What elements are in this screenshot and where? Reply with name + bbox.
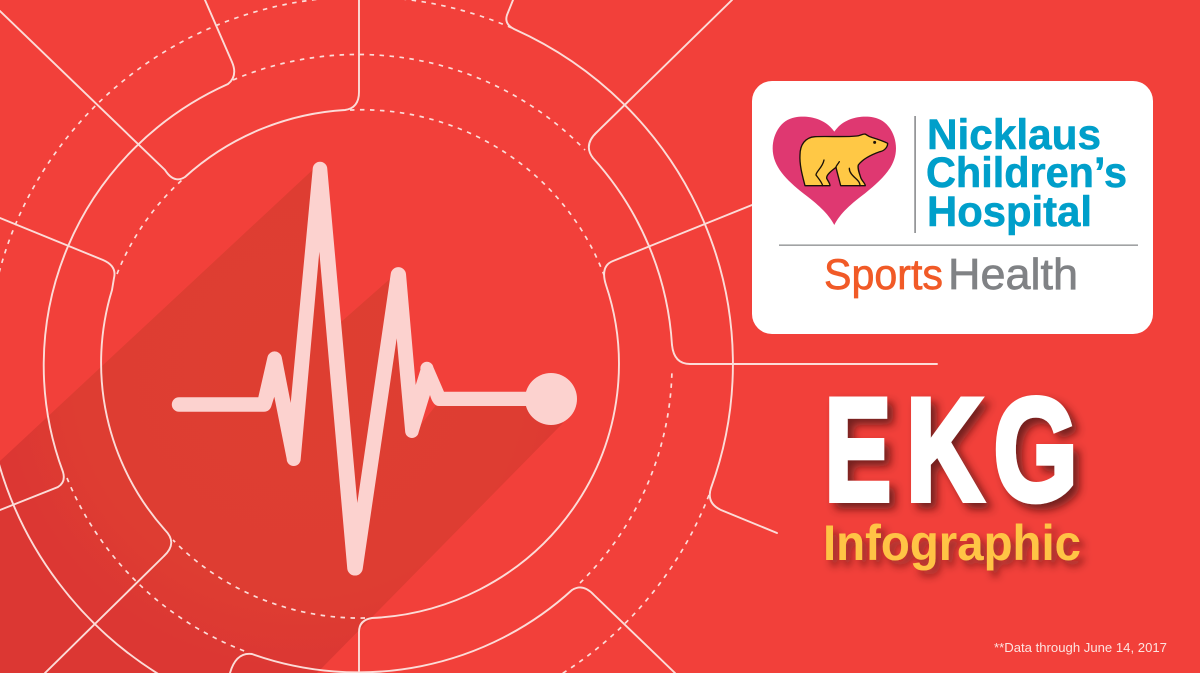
subtitle: Infographic: Infographic <box>823 515 1081 571</box>
circuit rings: dashed segments <box>0 0 709 673</box>
title: EKG: G <box>994 368 1078 531</box>
long shadow of the heartbeat line <box>0 163 563 673</box>
footnote: **Data through June 14, 2017 <box>994 640 1167 655</box>
hospital name: Nicklaus <box>927 111 1101 159</box>
circuit rings: solid segments <box>0 0 937 673</box>
title: EKG: K <box>906 368 983 531</box>
heartbeat line <box>172 162 577 576</box>
sports health wordmark <box>824 250 1078 299</box>
hospital name: Children’s <box>926 149 1127 197</box>
title: EKG: E <box>825 368 891 531</box>
hospital name <box>926 111 1127 236</box>
logo divider horizontal <box>779 244 1138 246</box>
title: EKG <box>825 368 1078 531</box>
sports health wordmark: Sports <box>824 251 943 299</box>
icon: heart with bear <box>773 117 896 225</box>
logo panel <box>752 81 1153 334</box>
logo divider vertical <box>914 116 916 233</box>
sports health wordmark: Health <box>948 250 1078 299</box>
hospital name: Hospital <box>927 188 1092 236</box>
